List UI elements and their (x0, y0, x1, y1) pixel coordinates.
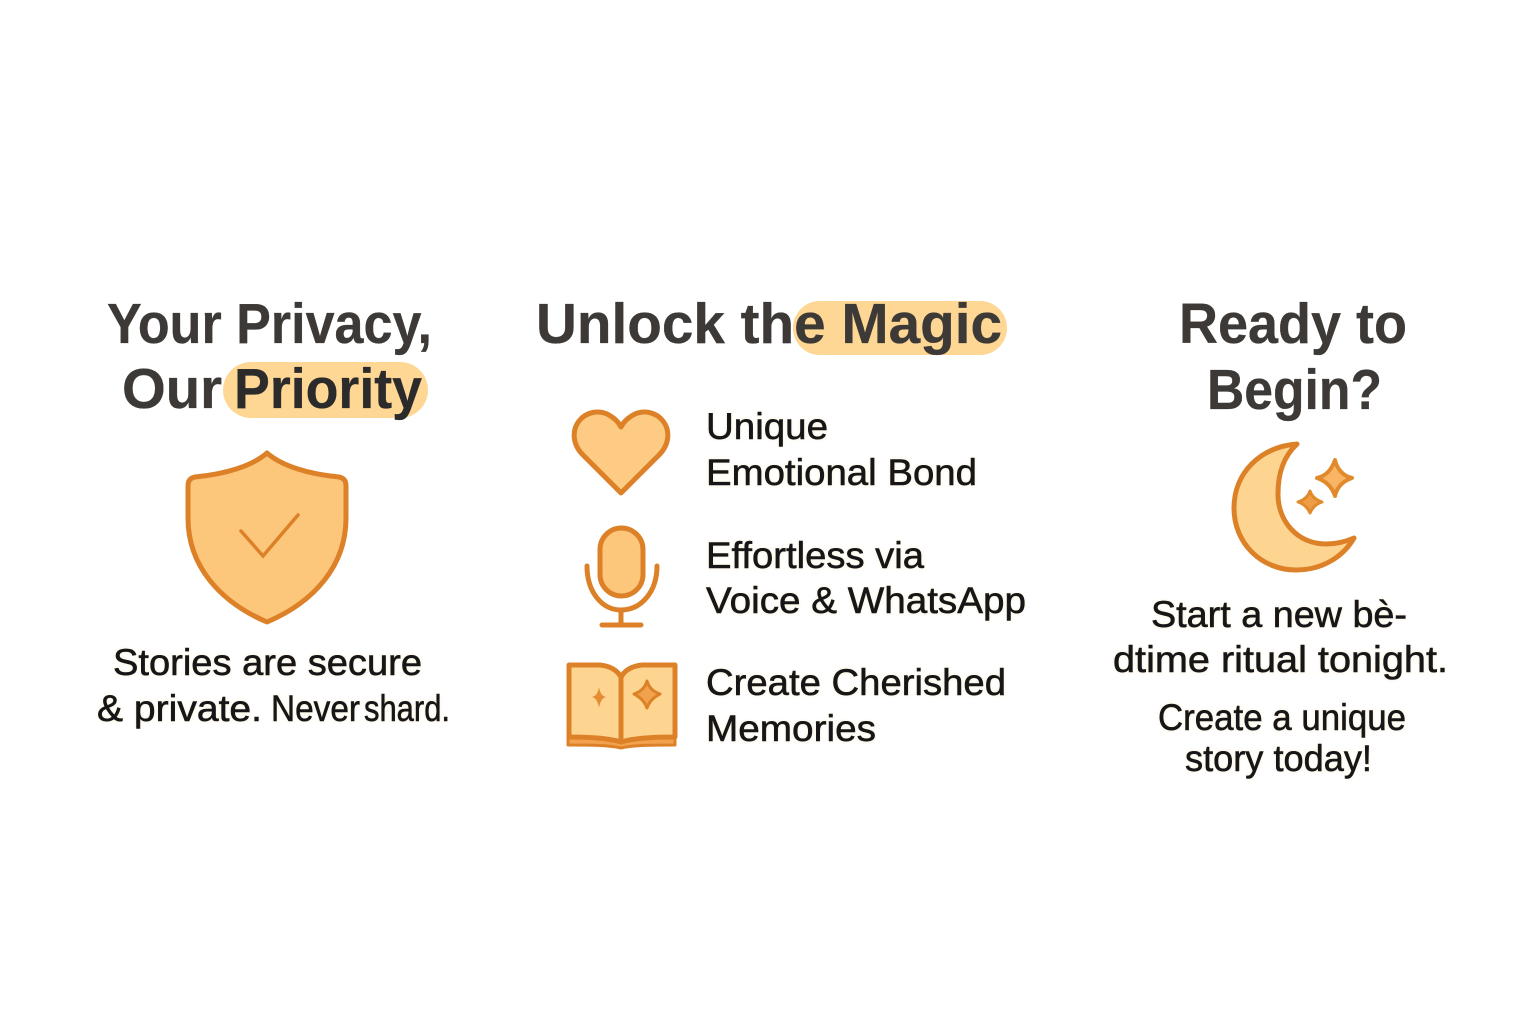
text: create a unique story today: Create a unique (1158, 697, 1406, 738)
text: stories are secure: shard. (364, 688, 450, 729)
icon: microphone (587, 528, 657, 625)
icon: shield with check (188, 453, 346, 622)
panel: privacy (97, 292, 450, 729)
text: create cherished memories: Memories (706, 708, 876, 749)
heading: ready to begin: Begin? (1207, 358, 1382, 422)
text: create cherished memories: Create Cherished (706, 662, 1006, 703)
text: create a unique story today: story today! (1185, 738, 1372, 779)
text: effortless via voice and whatsapp: Voice & WhatsApp (706, 580, 1026, 621)
text: create a unique story today (1158, 697, 1406, 779)
icon: crescent moon with stars (1234, 444, 1354, 570)
text: create cherished memories (706, 662, 1006, 749)
heading: your privacy our priority: Our (122, 357, 222, 421)
text: stories are secure: & private. (97, 688, 262, 729)
text: start a new bedtime ritual: dtime ritual tonight. (1113, 639, 1448, 680)
heading: unlock the magic: Unlock the Magic (536, 292, 1002, 356)
icon: heart (574, 412, 668, 493)
heading: ready to begin: Ready to (1179, 292, 1407, 356)
text: unique emotional bond (706, 406, 977, 493)
text: effortless via voice and whatsapp: Effortless via (706, 535, 924, 576)
text: stories are secure: Stories are secure (113, 642, 422, 683)
text: effortless via voice and whatsapp (706, 535, 1026, 621)
heading: your privacy our priority: Priority (234, 357, 422, 421)
text: start a new bedtime ritual (1113, 594, 1448, 680)
text: start a new bedtime ritual: Start a new bè- (1151, 594, 1407, 635)
text: unique emotional bond: Unique (706, 406, 828, 447)
text: stories are secure: Never (271, 688, 360, 729)
panel: unlock the magic (536, 292, 1026, 749)
heading: ready to begin (1179, 292, 1407, 422)
panel: ready to begin (1113, 292, 1448, 779)
icon: open book (568, 665, 675, 748)
heading: your privacy our priority: Your Privacy, (107, 292, 432, 356)
heading: your privacy our priority (107, 292, 432, 421)
text: unique emotional bond: Emotional Bond (706, 452, 977, 493)
text: stories are secure (97, 642, 450, 729)
